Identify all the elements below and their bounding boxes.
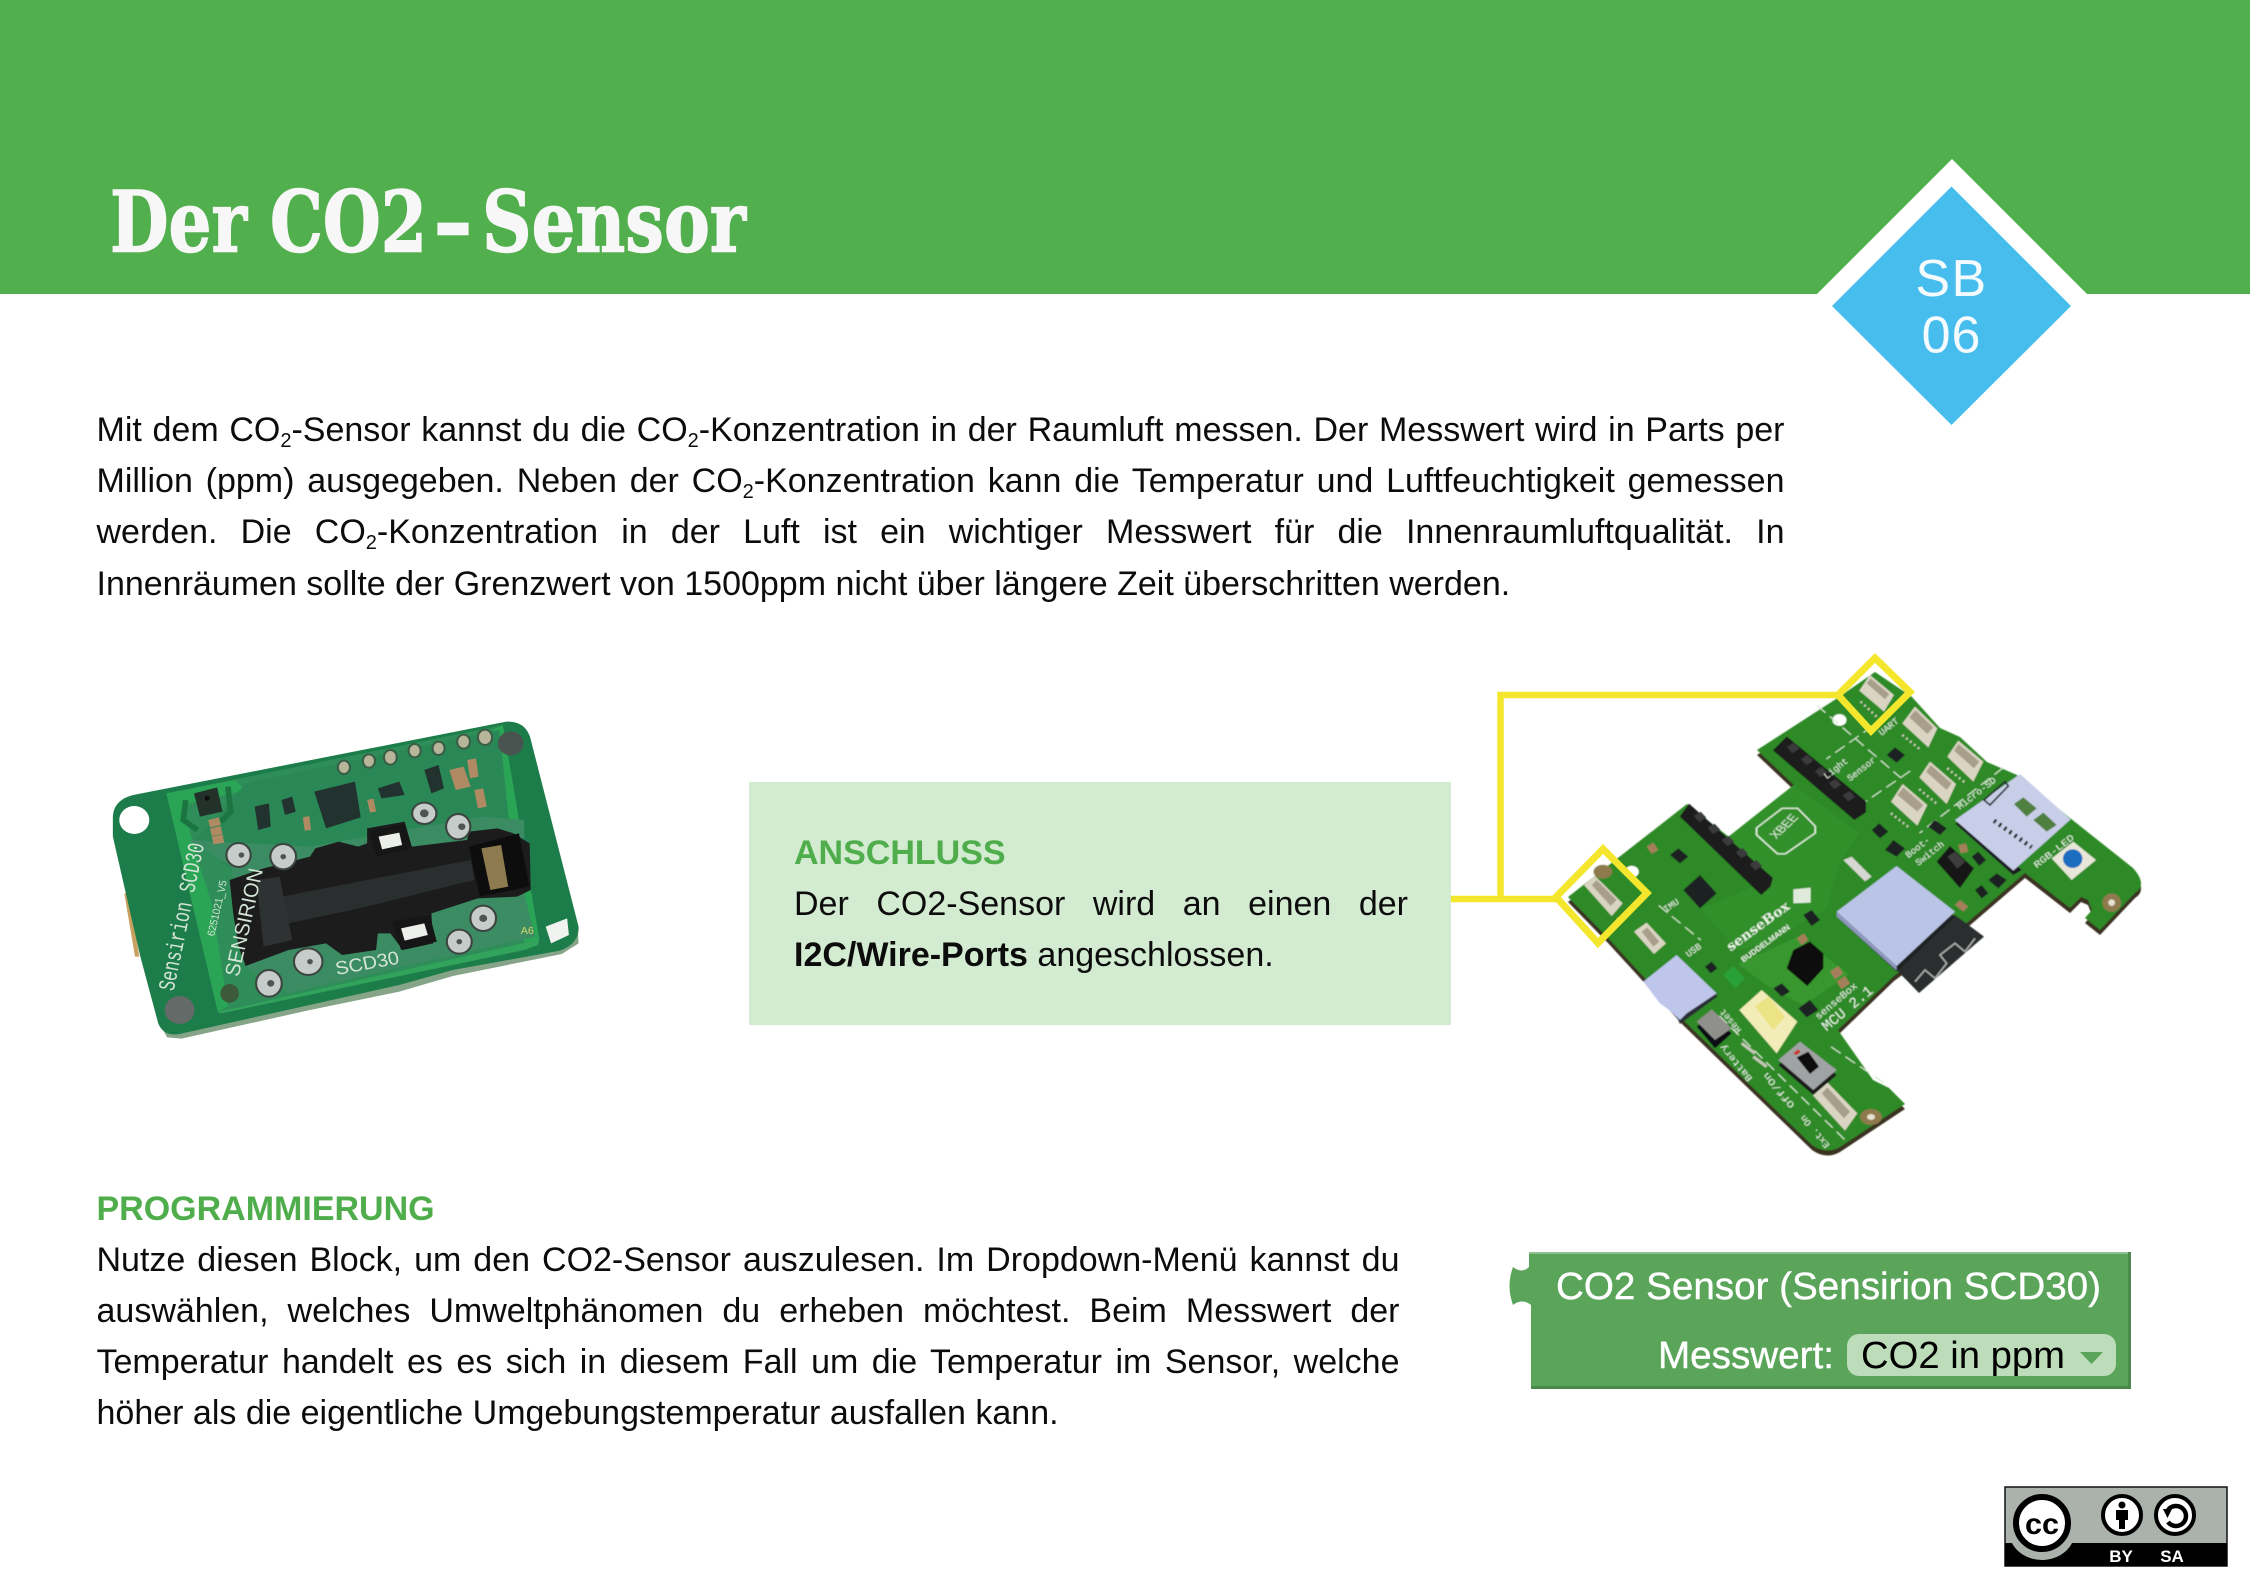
- silkscreen labels: right: Micro-SD: [1955, 775, 1999, 812]
- silkscreen labels: left: BUDDELMANN: [1739, 923, 1792, 964]
- connector line: [1451, 695, 1838, 899]
- text block: Programmierung: Temperatur handelt es es sich in diesem Fall um die Temperatur im Sensor, welche: [96, 1342, 1400, 1380]
- silkscreen labels: right: Boot-: [1903, 835, 1932, 861]
- text: Anschluss: ANSCHLUSS: [794, 834, 1006, 872]
- silkscreen labels: SCD30: [333, 947, 401, 980]
- board holes: [1594, 714, 1846, 879]
- silkscreen labels: A6: [521, 926, 534, 937]
- CC BY-SA license badge: SA: [2160, 1547, 2184, 1566]
- silkscreen labels: [154, 841, 534, 993]
- intro text block: Mit dem CO2-Sensor kannst du die CO2-Konzentration in der Raumluft messen. Der Messwert wird in Parts per: [96, 411, 1784, 452]
- connectors: [1859, 675, 1983, 828]
- silkscreen labels: right: Light: [1822, 756, 1851, 782]
- title: CO2: [270, 173, 427, 272]
- stretched-coordinate details: [1594, 706, 2003, 1140]
- text block: Programmierung: höher als die eigentliche Umgebungstemperatur ausfallen kann.: [96, 1394, 1059, 1432]
- silkscreen labels: left: Battery: [1717, 1042, 1755, 1083]
- XBEE footprint: [1757, 808, 1815, 854]
- text block: Programmierung: Nutze diesen Block, um den CO2-Sensor auszulesen. Im Dropdown-Menü kannst du: [96, 1240, 1400, 1278]
- CC BY-SA license badge: [2005, 1487, 2227, 1566]
- small components: [255, 765, 444, 830]
- text block: Programmierung: auswählen, welches Umweltphänomen du erheben möchtest. Beim Messwert der: [96, 1292, 1400, 1330]
- intro text block: werden. Die CO2-Konzentration in der Luft ist ein wichtiger Messwert für die Innenraumluftqualität. In: [96, 513, 1784, 554]
- Blockly block: [1510, 1252, 2131, 1389]
- badge: SB 06: SB: [1915, 250, 1988, 308]
- title: -: [433, 173, 473, 272]
- XBEE footprint: XBEE: [1766, 812, 1802, 841]
- connector lines and port highlights: [1451, 658, 1910, 943]
- board edge shadow: [1568, 677, 2141, 1156]
- silkscreen labels: left: [1661, 896, 1877, 1150]
- PCB outline: [1568, 672, 2141, 1151]
- port highlight: upper: [1838, 658, 1910, 731]
- pin row: [338, 730, 492, 774]
- battery pads: [1742, 1043, 1767, 1067]
- intro text block: Innenräumen sollte der Grenzwert von 1500ppm nicht über längere Zeit überschritten werden.: [96, 565, 1510, 603]
- RGB LED: [2052, 842, 2096, 880]
- photo: senseBox MCU board: [1568, 672, 2141, 1156]
- mounting holes: [119, 731, 569, 1024]
- silkscreen labels: left: Off/On: [1761, 1070, 1797, 1110]
- silkscreen labels: left: MCU 2.1: [1820, 983, 1877, 1035]
- lower mounting pad: [1860, 1109, 1882, 1125]
- silkscreen labels: right: UART: [1877, 716, 1901, 738]
- small parts: [1670, 848, 1820, 1017]
- silkscreen labels: 6251021_V5: [206, 879, 230, 937]
- silkscreen labels: right: Switch: [1913, 839, 1947, 868]
- micro SD slot: [1955, 774, 2071, 875]
- text: Anschluss: I2C/Wire-Ports angeschlossen.: [794, 936, 1274, 974]
- battery connector: [1739, 990, 1797, 1053]
- power switch: [1778, 1042, 1837, 1095]
- silkscreen labels: left: USB: [1684, 941, 1704, 960]
- silkscreen labels: left: senseBox: [1724, 898, 1794, 955]
- text: Anschluss: Der CO2-Sensor wird an einen der: [794, 884, 1408, 922]
- left half components: [1584, 843, 1877, 1150]
- right half components: [1822, 675, 2121, 993]
- silkscreen labels: SENSIRION: [221, 866, 268, 978]
- component: humidity sensor: [183, 787, 231, 830]
- silkscreen labels: left: Ext. On: [1798, 1112, 1832, 1150]
- intro text block: [96, 411, 1784, 603]
- silkscreen labels: right: RGB-LED: [2032, 832, 2077, 871]
- white contact boxes: [369, 823, 437, 950]
- silkscreen labels: right: Sensor: [1845, 755, 1878, 784]
- Blockly block: Messwert:: [1658, 1335, 1834, 1377]
- IMU chip: [1683, 875, 1717, 908]
- dashed silkscreen lines: [1617, 706, 2003, 1140]
- black CO2 measuring tube: [230, 822, 531, 966]
- Blockly block: CO2 Sensor (Sensirion SCD30): [1556, 1266, 2101, 1308]
- title: Der: [110, 173, 248, 272]
- title: Sensor: [482, 173, 747, 272]
- ESP module with antenna: [1837, 866, 1984, 993]
- USB-C port: [1643, 955, 1717, 1024]
- silkscreen labels: left: Reset: [1717, 1006, 1744, 1035]
- component: QFN chip: [314, 782, 361, 828]
- Blockly block: CO2 in ppm: [1861, 1335, 2065, 1377]
- connectors: [1584, 876, 1857, 1131]
- optical window: [469, 833, 530, 897]
- CC BY-SA license badge: BY: [2109, 1547, 2133, 1566]
- port highlight: lower: [1556, 849, 1647, 943]
- photo: SCD30 sensor module: [113, 722, 579, 1039]
- text: Anschluss: [794, 834, 1408, 974]
- CC BY-SA license badge: cc: [2025, 1508, 2059, 1541]
- inductor: [1787, 942, 1823, 986]
- text block: Programmierung: [96, 1190, 1400, 1432]
- silver screws: [226, 803, 496, 997]
- silkscreen labels: left: IMU: [1661, 896, 1681, 915]
- boot button: [1937, 846, 1974, 888]
- pin header sockets: [1680, 737, 1866, 895]
- panel: Anschluss: [749, 782, 1451, 1025]
- badge: SB 06: 06: [1922, 306, 1981, 364]
- badge: SB 06: [1804, 159, 2100, 455]
- header band: [0, 0, 2250, 294]
- silkscreen labels: Sensirion SCD30: [154, 841, 211, 993]
- silkscreen labels: right: [1822, 716, 2077, 871]
- silkscreen labels: left: senseBox: [1813, 981, 1860, 1022]
- intro text block: Million (ppm) ausgegeben. Neben der CO2-Konzentration kann die Temperatur und Luftfeuchtigkeit gemessen: [96, 462, 1784, 503]
- mounting pad: [2102, 893, 2121, 912]
- reset button: [1697, 1009, 1732, 1048]
- text block: Programmierung: PROGRAMMIERUNG: [96, 1190, 435, 1228]
- chips and passive parts: [1872, 747, 2007, 898]
